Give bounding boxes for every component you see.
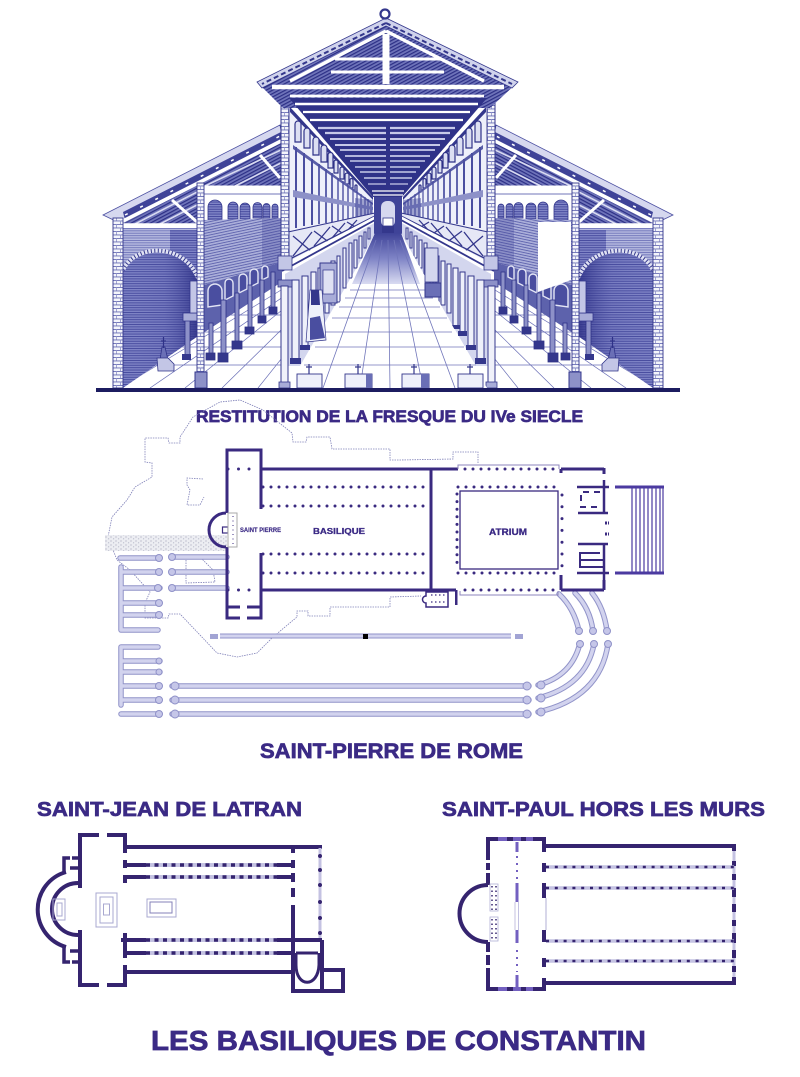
apse at far end of nave (374, 197, 402, 234)
transept and apse walls (209, 450, 261, 618)
aisle columns (206, 272, 277, 362)
heading: Saint-Jean de Latran: SAINT-JEAN DE LATRAN (37, 798, 302, 821)
purple transept highlights (498, 839, 533, 989)
left nave tomb and statues (306, 263, 337, 342)
hatched foundation band (105, 535, 227, 551)
aisle roof (103, 125, 283, 226)
inner apse (296, 953, 319, 982)
main pier (278, 78, 292, 388)
nave walls (261, 468, 604, 592)
label: Basilique: BASILIQUE (313, 526, 365, 536)
atrium outline (458, 465, 559, 595)
central nave gable and ceiling (257, 10, 518, 197)
label: Saint Pierre: SAINT PIERRE (240, 528, 281, 534)
dotted outline of the modern basilica (108, 400, 478, 657)
Circus of Nero remains (120, 554, 612, 718)
side walls lavender (732, 848, 736, 982)
gatehouse (577, 480, 609, 580)
caption: restitution: RESTITUTION DE LA FRESQUE DU IVe SIECLE (196, 407, 583, 426)
aisle floor (120, 225, 388, 388)
altars with crosses (297, 364, 483, 388)
right nave tomb (425, 248, 441, 297)
side altar near aisle pier (182, 281, 200, 360)
aisle end wall with arch (123, 228, 198, 388)
nave walls (544, 846, 736, 985)
small monument with cross (157, 337, 174, 371)
colonnades (228, 469, 562, 590)
label: Atrium: ATRIUM (489, 527, 527, 537)
stairs (615, 487, 664, 573)
colonnaded end wall (318, 848, 322, 938)
gallery lattice (282, 213, 375, 271)
right half mirror (388, 78, 673, 388)
main title: LES BASILIQUES DE CONSTANTIN (151, 1025, 646, 1056)
transept walls (488, 839, 544, 989)
nave outer walls (125, 847, 343, 991)
aisle side wall (203, 190, 282, 335)
apse (460, 885, 488, 942)
plan: Saint-Jean de Latran (38, 835, 343, 991)
illustration: restitution of the basilica interior (96, 10, 680, 392)
nave colonnade (285, 222, 376, 366)
aisle arcade arches (208, 266, 268, 307)
nave wall (290, 107, 373, 232)
left half of the building, mirrored for the right half (103, 78, 388, 388)
dotted sanctuary boxes (490, 884, 498, 941)
heading: Saint-Pierre de Rome: SAINT-PIERRE DE ROME (260, 740, 523, 763)
apse arcs (38, 858, 78, 962)
tomb enclosure (228, 513, 237, 547)
aisle pier with base (195, 183, 207, 388)
nave floor grid (296, 233, 487, 388)
outer wall pier (113, 218, 123, 388)
ground line (96, 388, 680, 392)
altar enclosures (53, 893, 176, 927)
plan: Saint-Pierre de Rome (105, 400, 664, 718)
side chapel (422, 590, 458, 607)
transept walls (80, 835, 125, 985)
colonnades (546, 867, 734, 961)
heading: Saint-Paul hors les murs: SAINT-PAUL HORS LES MURS (442, 798, 765, 821)
bright patch on right aisle wall (538, 222, 571, 292)
colonnades (121, 865, 318, 953)
plan: Saint-Paul hors les murs (460, 839, 736, 989)
